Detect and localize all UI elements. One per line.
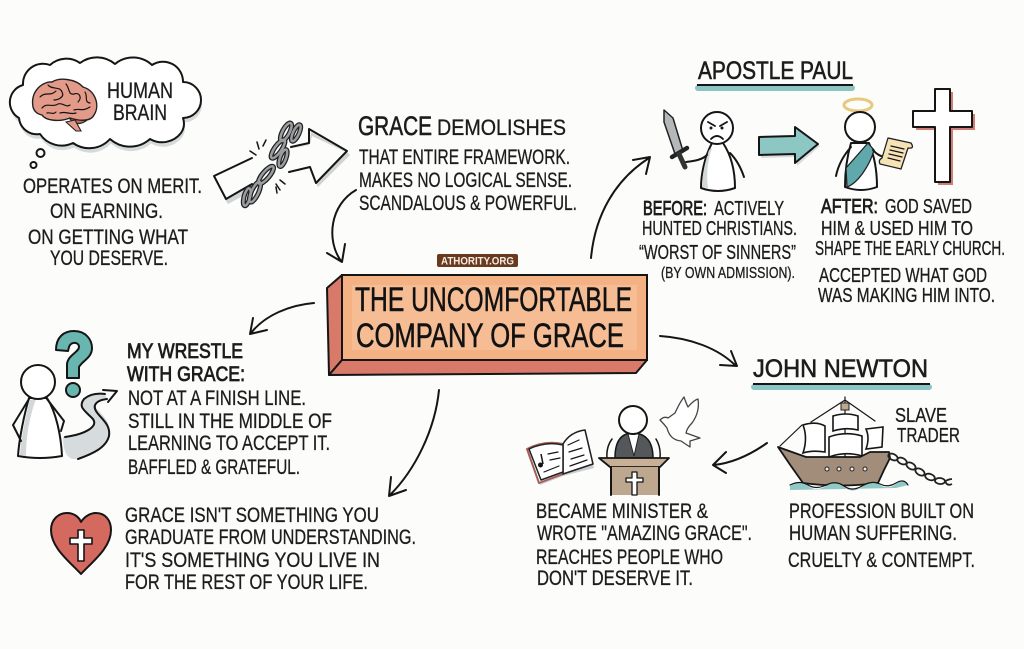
arrow: title to conclusion — [389, 390, 439, 496]
heading: my wrestle with grace: WITH GRACE: — [127, 363, 245, 386]
text: wrestle details — [128, 387, 332, 479]
arrow: title to Newton — [660, 336, 737, 366]
cloud label: HUMAN — [107, 78, 173, 103]
heading: my wrestle with grace — [127, 340, 245, 386]
text: conclusion: FOR THE REST OF YOUR LIFE. — [125, 571, 368, 594]
arrow: slave trader to minister — [713, 443, 767, 473]
icon: brain — [33, 79, 97, 131]
label: slave trader: TRADER — [897, 425, 960, 447]
icon: question mark — [56, 331, 92, 397]
text: before: (BY OWN ADMISSION). — [661, 265, 795, 282]
text: profession — [788, 500, 975, 572]
thought cloud: human brain — [10, 57, 202, 168]
icon: dove — [660, 397, 700, 447]
text: conclusion — [125, 504, 416, 594]
badge: athority.org: ATHORITY.ORG — [441, 256, 514, 268]
title block — [327, 275, 647, 375]
text: profession: HUMAN SUFFERING. — [789, 522, 957, 545]
text: before: ACTIVELY — [714, 198, 784, 220]
arrow: grace to title — [327, 190, 356, 262]
waves — [790, 481, 908, 490]
cloud label — [107, 78, 173, 125]
text: before: BEFORE: — [643, 198, 707, 220]
chain — [887, 452, 952, 485]
text: grace demolishes framework: SCANDALOUS & POWERFUL. — [359, 192, 577, 215]
arrow: title to Paul — [591, 157, 650, 258]
text: became minister: WROTE "AMAZING GRACE". — [537, 522, 752, 545]
text: human brain merit: ON GETTING WHAT — [28, 226, 188, 249]
text: conclusion: GRACE ISN'T SOMETHING YOU — [125, 504, 379, 527]
cloud label: BRAIN — [113, 100, 167, 125]
text: wrestle details: BAFFLED & GRATEFUL. — [128, 456, 300, 479]
heading: grace demolishes: GRACE — [358, 111, 432, 141]
label: slave trader: SLAVE — [895, 405, 947, 427]
text: grace demolishes framework — [359, 146, 577, 215]
text: after — [815, 196, 1005, 307]
icon: cross — [913, 89, 975, 185]
thought bubbles — [30, 149, 44, 168]
text: profession: PROFESSION BUILT ON — [789, 500, 974, 523]
text: became minister — [536, 500, 752, 590]
text: grace demolishes framework: THAT ENTIRE FRAMEWORK. — [359, 146, 570, 169]
text: human brain merit: OPERATES ON MERIT. — [23, 175, 202, 198]
text: profession: CRUELTY & CONTEMPT. — [788, 549, 975, 572]
heading: John Newton: JOHN NEWTON — [753, 355, 928, 383]
chain links — [242, 122, 303, 206]
text: after: HIM & USED HIM TO — [821, 218, 973, 240]
icon: angry figure with sword — [664, 110, 744, 191]
heading: my wrestle with grace: MY WRESTLE — [127, 340, 243, 363]
title text: COMPANY OF GRACE — [356, 317, 624, 355]
heading: grace demolishes — [358, 111, 577, 215]
text: became minister: DON'T DESERVE IT. — [537, 567, 693, 590]
icon: open hymn book — [527, 430, 594, 485]
text: wrestle details: NOT AT A FINISH LINE. — [128, 387, 306, 410]
text: wrestle details: LEARNING TO ACCEPT IT. — [128, 432, 330, 455]
text: human brain merit: YOU DESERVE. — [50, 247, 168, 270]
title text — [355, 281, 632, 355]
arrow: title to wrestle — [250, 303, 314, 334]
icon: minister at pulpit — [599, 406, 669, 495]
text: wrestle details: STILL IN THE MIDDLE OF — [128, 410, 332, 433]
text: before: “WORST OF SINNERS” — [639, 242, 796, 264]
text: human brain merit: ON EARNING. — [50, 200, 163, 223]
text: grace demolishes framework: MAKES NO LOGICAL SENSE. — [359, 169, 572, 192]
text: conclusion: IT'S SOMETHING YOU LIVE IN — [125, 549, 380, 572]
icon: slave ship with chain — [778, 397, 952, 490]
icon: winding road — [63, 390, 117, 459]
text: became minister: REACHES PEOPLE WHO — [536, 546, 723, 569]
text: human brain merit — [23, 175, 202, 270]
title text: THE UNCOMFORTABLE — [355, 281, 632, 319]
icon: broken arrow and chain — [214, 122, 350, 206]
icon: thinking person — [13, 365, 64, 458]
text: after: GOD SAVED — [885, 196, 972, 218]
text: became minister: BECAME MINISTER & — [536, 500, 708, 523]
text: before — [639, 198, 797, 282]
heading: grace demolishes: DEMOLISHES — [437, 115, 566, 140]
icon: saint with halo and scroll — [836, 99, 912, 190]
text: before: HUNTED CHRISTIANS. — [642, 218, 797, 240]
arrow: before to after — [759, 127, 820, 166]
icon: heart with cross — [51, 513, 111, 574]
text: after: AFTER: — [821, 196, 878, 218]
text: conclusion: GRADUATE FROM UNDERSTANDING. — [125, 526, 416, 549]
heading: Apostle Paul: APOSTLE PAUL — [698, 57, 853, 85]
label: slave trader — [895, 405, 960, 447]
